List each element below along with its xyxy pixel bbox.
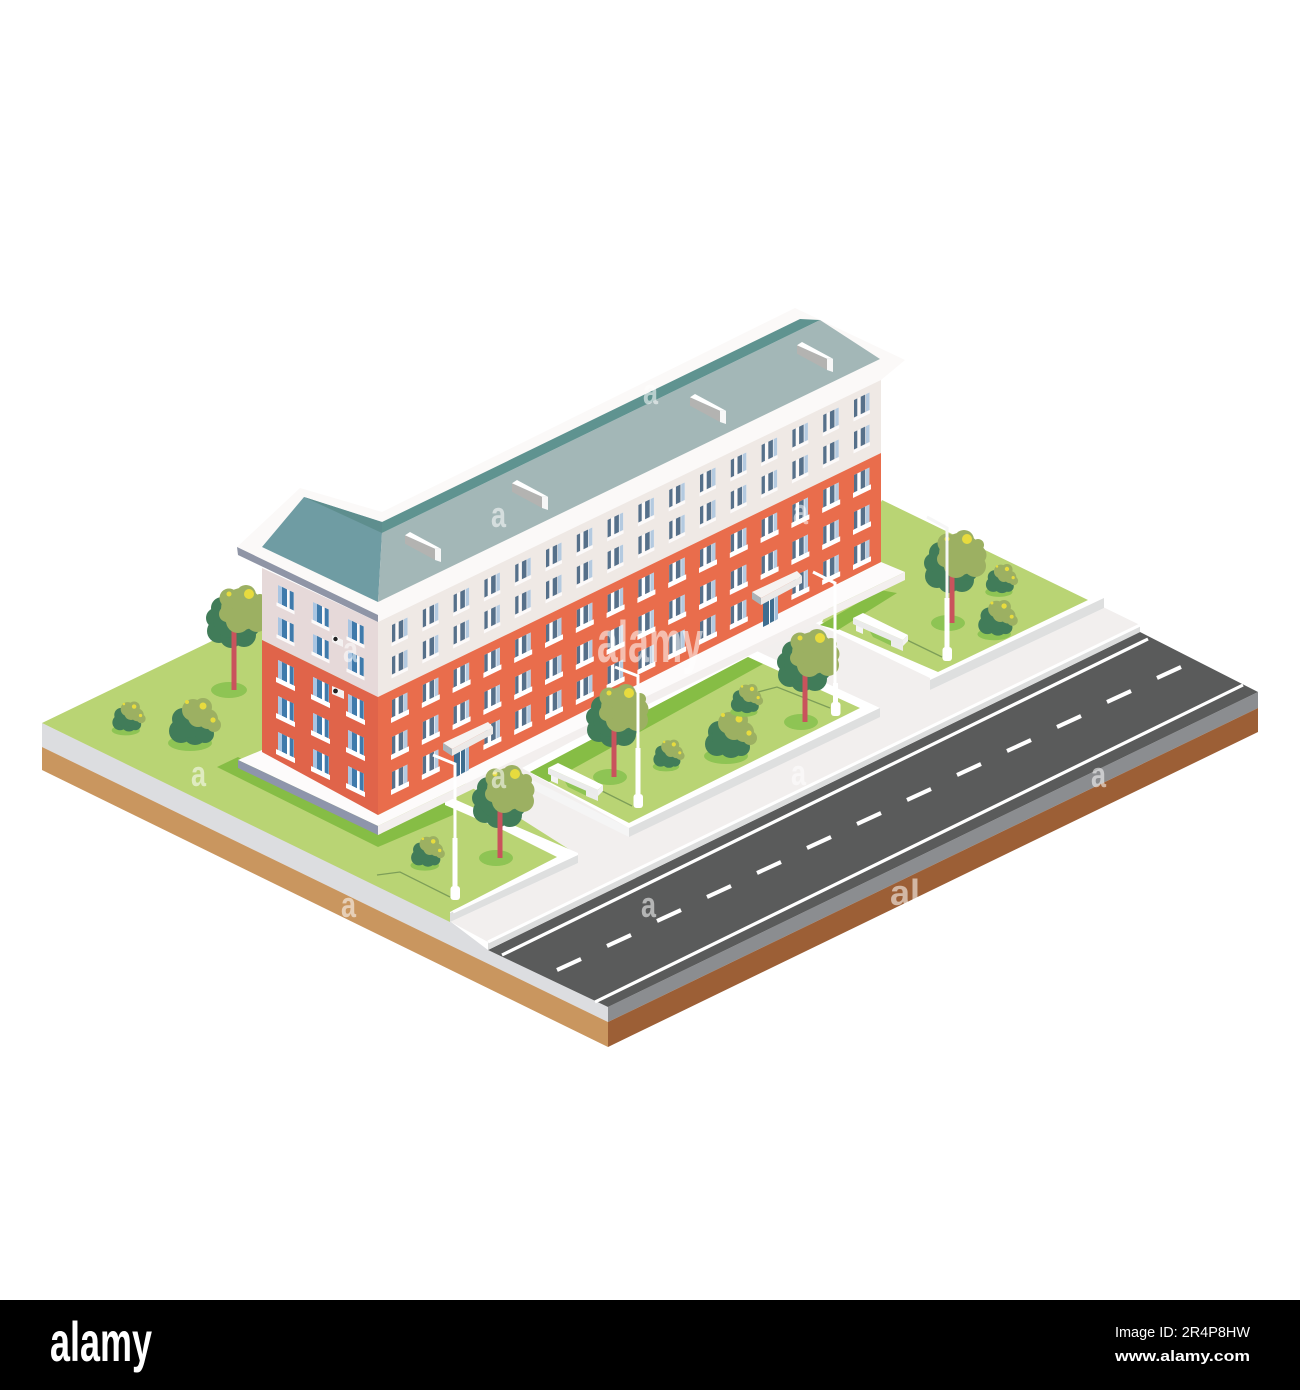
benches [548,613,908,801]
watermarks: a [343,629,359,670]
watermarks: alamy [597,610,703,675]
roof vents [405,342,833,562]
watermarks: a [793,491,809,532]
footer bar [0,1300,1300,1390]
windows: side wall [276,584,365,797]
lamp shadows [377,640,942,897]
street lamps [433,517,952,900]
watermarks [191,371,1107,925]
watermarks: a [491,494,507,535]
lawn: centre [522,647,880,837]
entrance doors with canopies [443,571,802,778]
roof [237,308,905,622]
watermarks: a [491,755,507,796]
watermarks: a [191,753,207,794]
trees [472,530,986,866]
lawn: right [805,500,1104,690]
watermarks: a [641,884,657,925]
windows: front wall [391,392,871,795]
building plinth [238,562,905,835]
watermarks: al [890,872,920,913]
ground slab [42,692,1258,1047]
building [237,308,905,835]
bushes [112,564,1018,871]
tree behind building [206,585,268,698]
footer logo: alamy [50,1310,152,1373]
watermarks: a [791,752,807,793]
watermarks: a [643,371,659,412]
watermarks: a [341,884,357,925]
road [488,632,1258,1007]
image id: Image ID: 2R4P8HW [1115,1325,1250,1341]
sidewalk [378,570,1140,950]
watermarks: a [1091,754,1107,795]
website: www.alamy.com [1114,1348,1250,1365]
walls [262,378,881,815]
lawn: left [42,613,578,922]
air conditioners [332,635,344,699]
